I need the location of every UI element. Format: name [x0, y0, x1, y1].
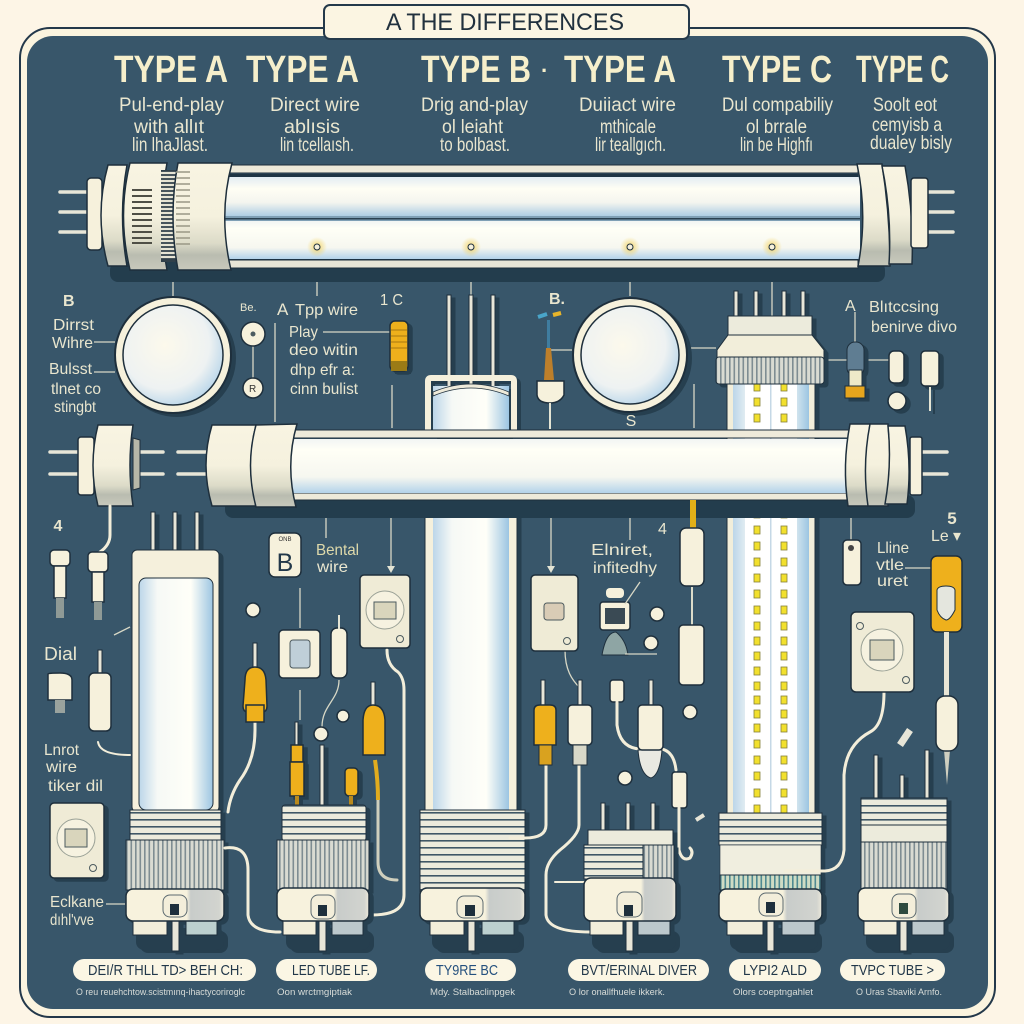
- callouts: lower left labels: uret: [877, 573, 909, 590]
- callouts: left middle labels: stingbt: [54, 399, 96, 416]
- bottom captions: O reu reuehchtow.scistmınq-ihactycoriroglc: [76, 987, 245, 998]
- base: second driver: [277, 722, 370, 951]
- icons: Type B wiring group: [510, 500, 704, 932]
- column descriptions: Dul compabiliy: [722, 95, 833, 116]
- callouts: left middle labels: Be.: [240, 302, 257, 314]
- icon: lens Type B: [573, 298, 687, 412]
- icon: lens Type A: [115, 297, 231, 413]
- bottom captions: O Uras Sbaviki Arnfo.: [856, 987, 942, 998]
- badge: B: [269, 533, 301, 577]
- column descriptions: Direct wire: [270, 95, 360, 116]
- tube: vertical Type C LED strip: [716, 291, 824, 951]
- column descriptions: with allıt: [133, 117, 205, 138]
- icons: left plugs: [48, 506, 260, 755]
- callouts: left middle labels: 1 C: [380, 292, 403, 309]
- callouts: left middle labels: Dirrst: [53, 317, 95, 334]
- tube: vertical Type B: [420, 295, 525, 951]
- column headings: ·: [541, 58, 548, 83]
- callouts: right middle labels: A: [845, 298, 856, 315]
- column descriptions: lin tcellaısh.: [280, 135, 354, 156]
- callouts: lower left labels: [44, 540, 909, 929]
- column headings: TYPE C: [856, 49, 949, 91]
- badge: B: ONB: [278, 537, 292, 543]
- callouts: right middle labels: Blıtccsing: [869, 299, 939, 316]
- callouts: left middle labels: B: [63, 293, 75, 310]
- column headings: TYPE B: [421, 49, 531, 91]
- column descriptions: lir teallgıch.: [595, 135, 666, 156]
- bottom captions: [76, 987, 942, 998]
- icons: Type C wiring group: [785, 540, 962, 871]
- icons: Type A wiring group: [225, 575, 410, 932]
- callouts: right middle labels: 5: [947, 509, 957, 528]
- base: third driver: [584, 803, 676, 951]
- column: Type A left tube: [126, 512, 224, 951]
- icon: small probe B: [537, 313, 564, 429]
- callouts: left middle labels: Play: [289, 324, 318, 341]
- callouts: right middle labels: [54, 291, 961, 545]
- column descriptions: ol leiaht: [442, 117, 504, 138]
- column headings: [114, 49, 949, 91]
- callouts: lower left labels: Lline: [877, 540, 909, 557]
- column descriptions: dualey bisly: [870, 133, 952, 154]
- callouts: left middle labels: Bulsst: [49, 361, 93, 378]
- callouts: right middle labels: benirve divo: [871, 319, 957, 336]
- callouts: left middle labels: dhp efr a:: [290, 362, 355, 379]
- column descriptions: [119, 95, 952, 156]
- bottom captions: Oon wrctmgiptiak: [277, 987, 352, 998]
- column descriptions: to bolbast.: [440, 135, 510, 156]
- base: fourth driver: [858, 750, 950, 951]
- badge: B: B: [277, 549, 293, 577]
- callouts: right middle labels: S: [626, 413, 636, 430]
- bottom labels: BVT/ERINAL DIVER: [581, 962, 697, 979]
- column headings: TYPE A: [114, 49, 228, 91]
- bottom captions: O lor onallfhuele ikkerk.: [569, 987, 665, 998]
- bottom labels: DEI/R THLL TD> BEH CH:: [88, 962, 243, 979]
- callouts: left middle labels: deo witin: [289, 342, 358, 359]
- column headings: TYPE C: [722, 49, 832, 91]
- callouts: left middle labels: Tpp wire: [295, 302, 358, 319]
- bottom labels: TVPC TUBE >: [851, 962, 934, 979]
- column descriptions: ol brrale: [746, 117, 807, 138]
- callouts: lower left labels: wire: [45, 759, 77, 776]
- bottom labels: LED TUBE LF.: [292, 962, 370, 979]
- bottom labels: [73, 959, 945, 981]
- callouts: left middle labels: cinn bulist: [290, 381, 359, 398]
- callouts: lower left labels: vtle: [876, 557, 904, 574]
- column descriptions: Soolt eot: [873, 95, 938, 116]
- horizontal tube: lower tube: [50, 424, 947, 518]
- column headings: TYPE A: [246, 49, 359, 91]
- LED indicator dots on top tube: [307, 237, 782, 257]
- callouts: lower left labels: Bental: [316, 542, 359, 559]
- callouts: lower left labels: Lnrot: [44, 742, 80, 759]
- callouts: left middle labels: tlnet co: [51, 381, 101, 398]
- callouts: lower left labels: Elniret,: [591, 542, 653, 559]
- callouts: lower left labels: Eclkane: [50, 894, 104, 911]
- callouts: left middle labels: A: [277, 300, 289, 319]
- column headings: TYPE A: [564, 49, 676, 91]
- callouts: lower left labels: Dial: [44, 644, 77, 664]
- callouts: lower left labels: dıhl'vve: [50, 912, 94, 929]
- icon: wall switch lower left: [50, 803, 104, 878]
- bottom labels: LYPI2 ALD: [743, 962, 807, 979]
- callouts: lower left labels: tiker dil: [48, 778, 103, 795]
- bottom captions: Mdy. Stalbaclinpgek: [430, 987, 515, 998]
- callouts: right middle labels: 4: [658, 521, 667, 538]
- column descriptions: Drig and-play: [421, 95, 528, 116]
- icon: yellow fuse connector: [390, 321, 408, 371]
- column descriptions: lin be Highfı: [740, 135, 813, 156]
- column descriptions: ablısis: [284, 117, 340, 138]
- bottom captions: Olors coeptngahlet: [733, 987, 813, 998]
- callouts: lower left labels: wire: [316, 559, 348, 576]
- column descriptions: lin lhaJlast.: [132, 135, 208, 156]
- callouts: right middle labels: Le ▾: [931, 528, 961, 545]
- callouts: lower left labels: infitedhy: [593, 560, 657, 577]
- leader lines from top tube: [94, 250, 931, 904]
- title: A THE DIFFERENCES: [386, 9, 624, 36]
- icons: right top connectors: [845, 342, 939, 411]
- callouts: right middle labels: B.: [549, 291, 565, 308]
- callouts: right middle labels: 4: [54, 518, 63, 535]
- callouts: left middle labels: Wihre: [52, 335, 93, 352]
- column descriptions: mthicale: [600, 117, 656, 138]
- bottom labels: TY9RE BC: [436, 962, 498, 979]
- horizontal tube: top double tube: [60, 163, 953, 282]
- callouts: left middle labels: R: [249, 384, 256, 395]
- callouts: left middle labels: [49, 292, 403, 416]
- column descriptions: Pul-end-play: [119, 95, 224, 116]
- title: [324, 5, 689, 39]
- column descriptions: cemyisb a: [872, 115, 942, 136]
- column descriptions: Duiiact wire: [579, 95, 676, 116]
